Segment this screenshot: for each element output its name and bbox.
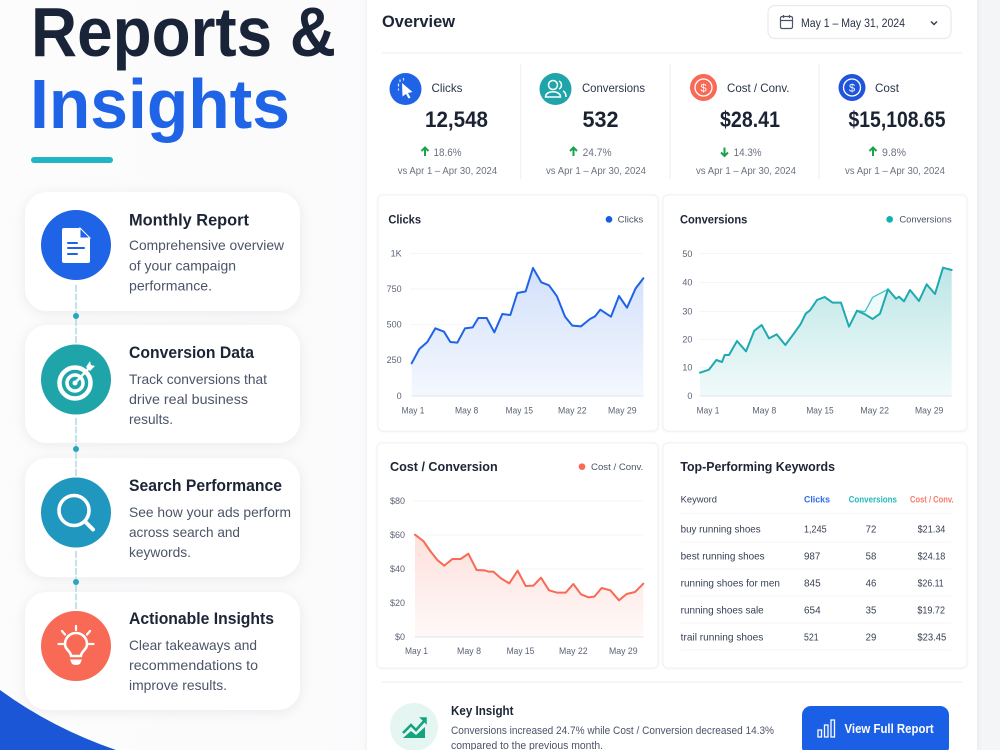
description xyxy=(129,371,267,427)
key insight callout: Conversions increased 24.7% while Cost / Conversion decreased 14.3% xyxy=(451,725,774,737)
line chart: 250 xyxy=(387,355,402,365)
line chart: 40 xyxy=(682,278,692,288)
KPI: Cost: vs Apr 1 – Apr 30, 2024 xyxy=(845,166,945,177)
description: improve results. xyxy=(129,677,227,693)
line chart: 30 xyxy=(682,306,692,316)
button: View Full Report xyxy=(802,706,949,750)
button: View Full Report: View Full Report xyxy=(844,721,934,736)
KPI: Conversions xyxy=(540,73,646,177)
line chart: 750 xyxy=(387,284,402,294)
heading: Conversion Data xyxy=(129,344,255,362)
table header xyxy=(681,494,954,504)
heading: Overview: Overview xyxy=(382,13,455,31)
line chart: 0 xyxy=(397,391,402,401)
description xyxy=(129,237,285,294)
description: performance. xyxy=(129,278,212,294)
description xyxy=(129,637,258,693)
panel: Top-Performing Keywords xyxy=(663,443,967,668)
row: best running shoes: best running shoes xyxy=(681,551,765,562)
description: See how your ads perform xyxy=(129,504,291,520)
row: running shoes for men: $26.11 xyxy=(918,578,944,589)
icon: magnifier xyxy=(41,478,111,548)
KPI: Conversions: 532 xyxy=(582,107,618,132)
row: running shoes for men xyxy=(681,578,944,589)
row: running shoes for men: 46 xyxy=(866,578,876,589)
line chart: $40 xyxy=(390,564,405,574)
line chart: May 29 xyxy=(609,646,638,656)
row: running shoes sale: 654 xyxy=(804,605,821,616)
icon: growth chart xyxy=(390,703,438,750)
line chart: 1K xyxy=(391,249,402,259)
legend: Conversions xyxy=(899,215,952,225)
description: across search and xyxy=(129,524,240,540)
table header: Cost / Conv. xyxy=(910,494,954,504)
KPI: Cost per conversion: vs Apr 1 – Apr 30, 2024 xyxy=(696,166,796,177)
KPI: Cost xyxy=(838,74,946,177)
feature card: Conversion Data xyxy=(25,325,300,443)
row: running shoes sale: running shoes sale xyxy=(681,605,764,616)
line chart: May 1 xyxy=(405,646,428,656)
chart panel: Conversions: Conversions xyxy=(680,212,748,226)
chart panel: Clicks xyxy=(378,195,658,431)
row: best running shoes: $24.18 xyxy=(918,551,945,562)
blue corner shape xyxy=(0,690,116,750)
row: best running shoes: 58 xyxy=(866,551,876,562)
icon: users xyxy=(540,73,572,105)
KPI: Cost: 9.8% xyxy=(882,147,906,159)
KPI: Cost: Cost xyxy=(875,81,900,95)
description: Clear takeaways and xyxy=(129,637,257,653)
line chart: May 22 xyxy=(558,405,587,415)
key insight callout: Key Insight xyxy=(451,704,514,718)
KPI: Clicks: 12,548 xyxy=(425,107,488,132)
panel: Top-Performing Keywords: Top-Performing Keywords xyxy=(680,460,835,474)
line chart xyxy=(390,496,643,656)
line chart: May 22 xyxy=(559,646,588,656)
header divider xyxy=(382,52,962,54)
description: Track conversions that xyxy=(129,371,267,387)
KPI: Clicks: 18.6% xyxy=(434,147,462,159)
icon: blue dollar: $ xyxy=(849,82,855,94)
line chart: $60 xyxy=(390,530,405,540)
row: trail running shoes xyxy=(681,632,946,643)
row: trail running shoes: 521 xyxy=(804,632,819,643)
title accent bar xyxy=(31,157,113,163)
line chart: 500 xyxy=(387,319,402,329)
KPI dividers xyxy=(521,64,819,179)
table header: Conversions xyxy=(849,494,897,504)
KPI: Cost per conversion: 14.3% xyxy=(734,147,762,159)
timeline connectors xyxy=(73,285,79,610)
row: running shoes for men: running shoes for men xyxy=(681,578,780,589)
row: trail running shoes: $23.45 xyxy=(917,632,946,643)
chart panel: Cost / Conversion: Cost / Conversion xyxy=(390,460,498,474)
line chart xyxy=(387,249,643,415)
line chart: May 15 xyxy=(806,405,834,415)
line chart xyxy=(682,249,952,415)
KPI: Cost per conversion xyxy=(690,74,796,177)
line chart: 50 xyxy=(682,249,692,259)
line chart: May 8 xyxy=(457,646,481,656)
row: best running shoes xyxy=(681,551,945,562)
line chart: May 1 xyxy=(402,405,424,415)
date range selector xyxy=(768,6,951,38)
footer divider xyxy=(382,681,962,683)
description: keywords. xyxy=(129,544,191,560)
icon: light bulb xyxy=(41,611,111,681)
line chart: 10 xyxy=(682,363,692,373)
KPI: Cost: $15,108.65 xyxy=(848,107,946,132)
icon: coral dollar: $ xyxy=(700,82,707,94)
heading: Monthly Report xyxy=(129,212,249,230)
panel: dashboard xyxy=(367,0,977,750)
key insight callout xyxy=(390,703,774,750)
heading: Search Performance xyxy=(129,477,282,495)
row: running shoes sale: $19.72 xyxy=(917,605,945,616)
KPI: Conversions: Conversions xyxy=(582,81,645,95)
KPI: Clicks: vs Apr 1 – Apr 30, 2024 xyxy=(398,166,498,177)
KPI: Cost per conversion: Cost / Conv. xyxy=(727,81,790,95)
description: Comprehensive overview xyxy=(129,237,285,253)
line chart: May 8 xyxy=(752,405,776,415)
row: buy running shoes: $21.34 xyxy=(918,524,946,535)
description: recommendations to xyxy=(129,657,258,673)
chart panel: Clicks: Clicks xyxy=(388,212,421,226)
table xyxy=(681,494,954,650)
line chart: May 8 xyxy=(455,405,478,415)
KPI: Clicks xyxy=(390,73,498,177)
row: running shoes sale: 35 xyxy=(866,605,876,616)
chart panel: Cost / Conversion xyxy=(377,443,658,668)
KPI: Conversions: 24.7% xyxy=(583,147,612,159)
line chart: $80 xyxy=(390,496,405,506)
row: buy running shoes: 72 xyxy=(866,524,876,535)
line chart: $20 xyxy=(390,598,405,608)
title: Insights xyxy=(30,65,290,143)
title xyxy=(30,0,336,143)
table header: Clicks xyxy=(804,494,830,504)
icon: bars xyxy=(818,720,834,737)
feature card: Actionable Insights xyxy=(25,592,300,710)
row: running shoes for men: 845 xyxy=(804,578,821,589)
row: buy running shoes: 1,245 xyxy=(804,524,827,535)
line chart: May 15 xyxy=(506,405,533,415)
row: buy running shoes xyxy=(681,524,946,535)
line chart: May 29 xyxy=(915,405,943,415)
line chart: May 1 xyxy=(697,405,719,415)
legend xyxy=(606,215,644,225)
line chart: $0 xyxy=(395,632,405,642)
feature card: Search Performance xyxy=(25,458,300,577)
row: trail running shoes: trail running shoes xyxy=(681,632,764,643)
row: buy running shoes: buy running shoes xyxy=(681,524,761,535)
icon: target xyxy=(41,344,111,414)
feature card: Monthly Report xyxy=(25,192,300,311)
legend: Cost / Conv. xyxy=(591,462,643,472)
KPI: Clicks: Clicks xyxy=(432,81,462,95)
line chart: May 22 xyxy=(860,405,889,415)
legend: Clicks xyxy=(618,215,644,225)
heading: Actionable Insights xyxy=(129,610,274,628)
line chart: May 15 xyxy=(507,646,534,656)
row: trail running shoes: 29 xyxy=(866,632,876,643)
icon: cursor xyxy=(390,73,422,105)
row: running shoes sale xyxy=(681,605,945,616)
line chart: May 29 xyxy=(608,405,637,415)
chart panel: Conversions xyxy=(663,195,967,431)
line chart: 20 xyxy=(682,335,692,345)
KPI: Cost per conversion: $28.41 xyxy=(720,107,780,132)
icon: document xyxy=(41,210,111,280)
description: of your campaign xyxy=(129,258,236,274)
date range selector: May 1 – May 31, 2024 xyxy=(801,18,906,30)
description: results. xyxy=(129,411,173,427)
row: best running shoes: 987 xyxy=(804,551,820,562)
line chart: 0 xyxy=(687,391,692,401)
description xyxy=(129,504,291,560)
description: drive real business xyxy=(129,391,248,407)
KPI: Conversions: vs Apr 1 – Apr 30, 2024 xyxy=(546,166,646,177)
table header: Keyword xyxy=(681,494,717,504)
